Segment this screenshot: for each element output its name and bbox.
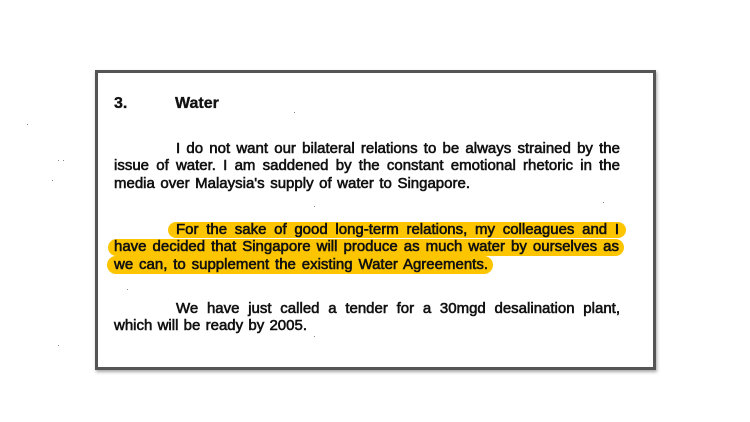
highlighted text: line two: have decided that Singapore will produce as much water by ourselves as xyxy=(114,238,619,255)
paragraph: bilateral relations xyxy=(114,140,620,192)
paragraph: bilateral relations: media over Malaysia's supply of water to Singapore. xyxy=(114,175,470,192)
heading: Water: Water xyxy=(175,95,219,112)
highlight: line one xyxy=(168,222,626,238)
paragraph: desalination plant xyxy=(114,300,620,334)
paragraph: desalination plant: which will be ready by 2005. xyxy=(114,317,307,334)
paragraph: bilateral relations: issue of water. I am saddened by the constant emotional rhetoric in the xyxy=(114,157,620,174)
highlighted text: line three: we can, to supplement the existing Water Agreements. xyxy=(114,256,488,273)
section number: 3. xyxy=(114,95,127,112)
highlighted paragraph: water self-sufficiency xyxy=(107,221,626,274)
paragraph: desalination plant: We have just called a tender for a 30mgd desalination plant, xyxy=(176,300,620,317)
highlight: line two xyxy=(108,239,624,256)
document frame xyxy=(95,70,656,370)
paragraph: bilateral relations: I do not want our bilateral relations to be always strained by the xyxy=(176,140,620,157)
highlight: line three xyxy=(107,256,493,274)
highlighted text: line one: For the sake of good long-term relations, my colleagues and I xyxy=(176,221,619,238)
